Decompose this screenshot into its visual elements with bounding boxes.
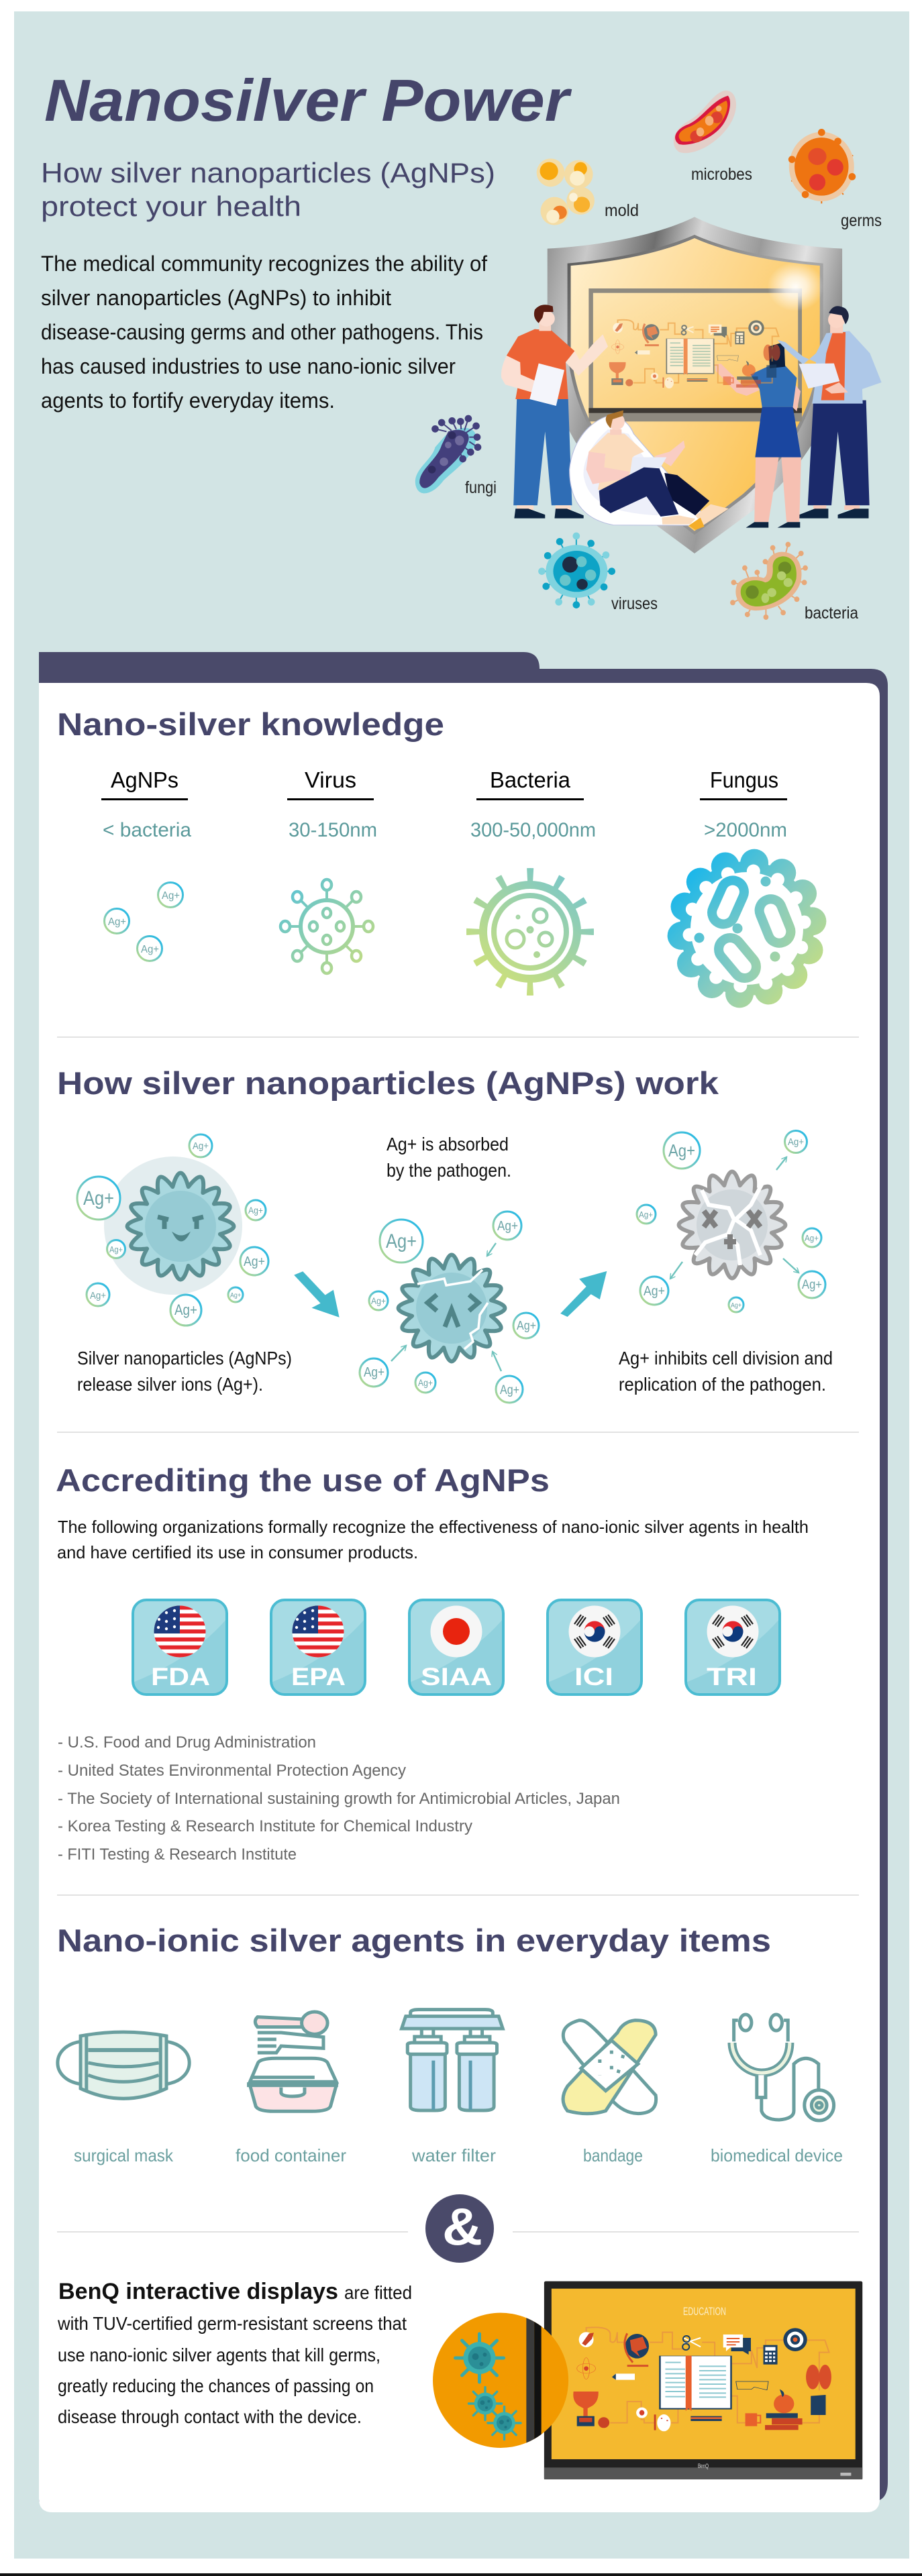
section: BenQ text: disease through contact with the device. (58, 2406, 362, 2427)
divider (57, 1432, 859, 1433)
heading: Nano-silver knowledge (57, 706, 444, 742)
step 1: pathogen with ions (77, 1134, 268, 1326)
badge: TRI (686, 1600, 780, 1695)
badge: SIAA: SIAA (421, 1663, 492, 1690)
step 1: pathogen with ions: Ag+ (90, 1290, 106, 1301)
intro paragraph: agents to fortify everyday items. (41, 388, 335, 413)
bottom black rule (0, 2573, 922, 2576)
intro paragraph (41, 252, 487, 413)
item labels: bandage (583, 2145, 643, 2165)
badge: TRI: TRI (707, 1663, 757, 1690)
section: accrediting (56, 1462, 809, 1864)
step 2 caption: Ag+ is absorbed (387, 1134, 509, 1155)
intro paragraph: The medical community recognizes the ability of (41, 252, 487, 276)
column headings: AgNPs (111, 767, 178, 792)
organization list: - FITI Testing & Research Institute (58, 1845, 297, 1864)
label: microbes: microbes (691, 165, 752, 184)
icon: virus (280, 879, 373, 973)
person: seated man in chair (570, 411, 729, 530)
step 3: destroyed pathogen: Ag+ (639, 1210, 653, 1220)
subtitle (41, 157, 495, 222)
size values: 30-150nm (289, 819, 377, 841)
light flare (767, 262, 824, 311)
icon: bacteria (474, 875, 586, 988)
organization list: - U.S. Food and Drug Administration (58, 1733, 316, 1752)
arrow: step 1 to step 2 (294, 1271, 340, 1318)
badge: EPA (271, 1600, 365, 1695)
label: viruses: viruses (611, 594, 658, 613)
step 3: destroyed pathogen: Ag+ (802, 1278, 822, 1292)
organization list: - The Society of International sustaining growth for Antimicrobial Articles, Japan (58, 1790, 620, 1808)
organization list: - Korea Testing & Research Institute for Chemical Industry (58, 1817, 472, 1835)
subtitle: protect your health (41, 191, 301, 222)
person: man left (501, 305, 608, 519)
item labels: surgical mask (74, 2145, 174, 2165)
size values: 300-50,000nm (470, 819, 596, 841)
step 1: pathogen with ions: Ag+ (174, 1301, 197, 1318)
step 1: pathogen with ions: Ag+ (193, 1140, 209, 1152)
step 3: destroyed pathogen: Ag+ (644, 1284, 665, 1299)
badge: EPA: EPA (291, 1663, 346, 1690)
step 1: pathogen with ions: Ag+ (248, 1205, 263, 1216)
magnified germs on screen surface (433, 2308, 568, 2453)
icon: microbes (674, 91, 736, 153)
size values: >2000nm (704, 819, 787, 841)
panel: main card backing (39, 652, 888, 2502)
panel: main white card (39, 683, 880, 2512)
section: BenQ text (57, 2279, 412, 2427)
step 2: pathogen absorbing ions: Ag+ (418, 1377, 433, 1388)
section: nano-silver knowledge (57, 706, 814, 996)
column headings: Bacteria (490, 767, 571, 792)
shield (548, 217, 842, 553)
column headings (101, 767, 787, 800)
icon: stethoscope (732, 2015, 834, 2121)
badge: SIAA (409, 1600, 503, 1695)
label: germs: germs (841, 211, 882, 230)
column headings: Fungus (710, 767, 778, 792)
organization list: - United States Environmental Protection Agency (58, 1762, 406, 1780)
hero text block (41, 67, 572, 413)
step 3: destroyed pathogen (637, 1131, 825, 1312)
paragraph: and have certified its use in consumer products. (57, 1542, 418, 1562)
step 2 caption: by the pathogen. (387, 1160, 511, 1181)
step 3: destroyed pathogen: Ag+ (731, 1302, 741, 1309)
label: fungi: fungi (465, 478, 497, 497)
icon: AgNPs particles (105, 883, 183, 961)
icon: germs (788, 129, 856, 203)
label: mold: mold (605, 201, 639, 220)
icon: viruses (538, 533, 615, 608)
paragraph: The following organizations formally recognize the effectiveness of nano-ionic silver agents in health (58, 1517, 809, 1537)
item labels: water filter (411, 2145, 496, 2165)
badge: ICI: ICI (574, 1663, 613, 1690)
heading: Nano-ionic silver agents in everyday items (57, 1923, 771, 1958)
brand mark: BenQ (698, 2463, 709, 2469)
section: how AgNPs work (57, 1065, 833, 1403)
intro paragraph: silver nanoparticles (AgNPs) to inhibit (41, 286, 391, 310)
step 2: pathogen absorbing ions: Ag+ (497, 1219, 518, 1234)
heading: Accrediting the use of AgNPs (56, 1462, 550, 1498)
step 1 caption: release silver ions (Ag+). (77, 1374, 263, 1395)
section: BenQ text: with TUV-certified germ-resistant screens that (57, 2313, 407, 2334)
icon: AgNPs particles: Ag+ (108, 916, 126, 928)
icon: shield with people illustration (501, 217, 882, 553)
icon: water filter (402, 2010, 503, 2110)
organization list (58, 1733, 620, 1864)
heading: How silver nanoparticles (AgNPs) work (57, 1065, 719, 1101)
item labels: biomedical device (711, 2145, 843, 2165)
section: BenQ text: greatly reducing the chances of passing on (58, 2375, 374, 2396)
person: man right (778, 306, 882, 519)
step 1 caption: Silver nanoparticles (AgNPs) (77, 1348, 292, 1368)
icon: mold (537, 158, 595, 225)
step 1: pathogen with ions: Ag+ (230, 1292, 241, 1299)
step 2: pathogen absorbing ions (360, 1212, 539, 1403)
section: BenQ text: are fitted (344, 2282, 412, 2303)
step 2: pathogen absorbing ions: Ag+ (386, 1230, 417, 1252)
step 3: destroyed pathogen: Ag+ (668, 1140, 695, 1161)
icon: flipchart art (609, 320, 780, 388)
icon: bacteria (730, 542, 808, 620)
title: Nanosilver Power (44, 67, 572, 133)
step 2: pathogen absorbing ions: Ag+ (517, 1319, 536, 1332)
step 1: pathogen with ions: Ag+ (109, 1244, 123, 1254)
paragraph (57, 1517, 809, 1562)
step 1 caption (77, 1348, 292, 1395)
icon: surgical mask (58, 2032, 189, 2098)
divider with ampersand (57, 2194, 859, 2263)
step 3 caption (619, 1348, 833, 1395)
step 2 caption (387, 1134, 511, 1181)
divider (57, 1036, 859, 1038)
divider (57, 1894, 859, 1896)
size values: < bacteria (103, 819, 191, 841)
step 2: pathogen absorbing ions: Ag+ (500, 1383, 519, 1397)
section: everyday items (57, 1923, 843, 2165)
icon: AgNPs particles: Ag+ (162, 890, 180, 902)
step 1: pathogen with ions: Ag+ (83, 1187, 114, 1210)
intro paragraph: disease-causing germs and other pathogens. This (41, 320, 483, 344)
step 3: destroyed pathogen: Ag+ (788, 1136, 804, 1148)
step 3 caption: Ag+ inhibits cell division and (619, 1348, 833, 1368)
arrow: step 2 to step 3 (560, 1271, 607, 1317)
step 1: pathogen with ions: Ag+ (244, 1254, 265, 1269)
section: BenQ text: use nano-ionic silver agents that kill germs, (58, 2345, 380, 2365)
icon: bandage (563, 2021, 656, 2114)
item labels: food container (236, 2145, 346, 2165)
badge: FDA (133, 1600, 227, 1695)
divider with ampersand: & (442, 2197, 482, 2256)
step 2: pathogen absorbing ions: Ag+ (364, 1365, 385, 1380)
subtitle: How silver nanoparticles (AgNPs) (41, 157, 495, 189)
badge: FDA: FDA (151, 1663, 210, 1690)
size values (103, 819, 787, 841)
badge: ICI (548, 1600, 642, 1695)
column headings: Virus (305, 767, 356, 792)
item labels (74, 2145, 843, 2165)
screen title: EDUCATION (683, 2305, 726, 2318)
step 3 caption: replication of the pathogen. (619, 1374, 826, 1395)
icon: fungi (415, 415, 481, 493)
icon: fungus (680, 861, 814, 996)
section: BenQ text: BenQ interactive displays (58, 2279, 338, 2304)
step 3: destroyed pathogen: Ag+ (805, 1233, 819, 1243)
step 2: pathogen absorbing ions: Ag+ (371, 1295, 386, 1306)
person: woman (715, 343, 801, 528)
label: bacteria: bacteria (805, 604, 858, 623)
intro paragraph: has caused industries to use nano-ionic silver (41, 354, 456, 378)
icon: food container (247, 2012, 338, 2111)
icon: BenQ interactive display (544, 2282, 862, 2479)
icon: AgNPs particles: Ag+ (141, 944, 159, 955)
flipchart display in shield (588, 288, 802, 421)
